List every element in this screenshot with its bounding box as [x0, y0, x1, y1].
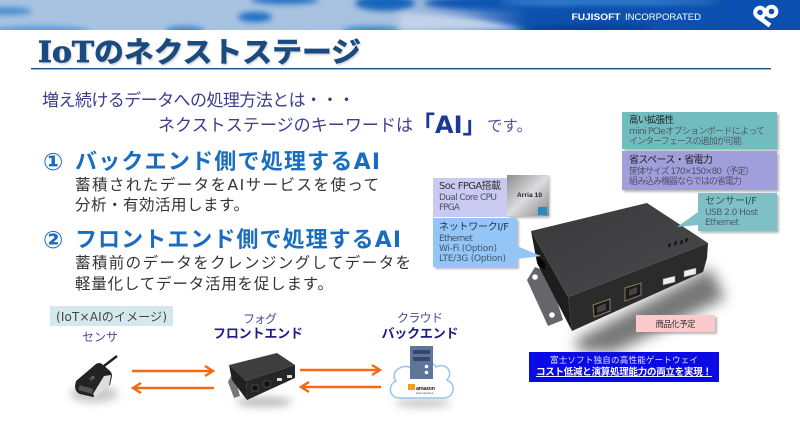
- image caption: (IoT×AIのイメージ): [56, 310, 167, 324]
- callout: network I/F: [433, 218, 541, 269]
- section 2: front-end AI: フロントエンド側で処理するAI: [75, 228, 401, 253]
- icon: Arria 10 chip: [507, 175, 550, 218]
- callout: space saving: 筐体サイズ 170×150×80（予定）: [629, 165, 754, 177]
- section 2: front-end AI: 蓄積前のデータをクレンジングしてデータを: [75, 253, 411, 272]
- intro text: です。: [487, 117, 532, 135]
- label: cloud back-end: クラウド: [397, 311, 443, 325]
- intro text: 「AI」: [411, 111, 487, 139]
- callout: network I/F: Wi-Fi (Option): [439, 244, 497, 254]
- company name: [572, 12, 701, 23]
- intro text: [42, 90, 532, 139]
- device shadow: [575, 268, 725, 352]
- arrow: sensor to fog: [132, 366, 213, 376]
- title: IoTのネクストステージ: [39, 36, 362, 70]
- title: [31, 35, 771, 70]
- callout: SoC FPGA: [433, 178, 509, 217]
- mounting flange: [527, 267, 563, 326]
- title: IoTのネクストステージ: [38, 35, 361, 69]
- label: sensor: センサ: [82, 330, 118, 344]
- company name: INCORPORATED: [625, 12, 701, 23]
- ethernet ports: [593, 299, 610, 317]
- section 1: back-end AI: 分析・有効活用します。: [75, 196, 249, 214]
- arrow: fog to cloud: [300, 365, 380, 375]
- callout: sensor I/F: Ethernet: [705, 218, 739, 228]
- icon: cloud server: [390, 346, 453, 408]
- label: cloud back-end: バックエンド: [382, 327, 458, 342]
- icon: fog gateway: [228, 353, 295, 407]
- icon: company logo: [755, 7, 776, 25]
- callout: SoC FPGA: Soc FPGA搭載: [439, 179, 501, 192]
- label: fog front-end: フロントエンド: [213, 327, 303, 342]
- icon: cloud server: amazon: [416, 386, 436, 392]
- callout: SoC FPGA: FPGA: [439, 203, 461, 213]
- label: fog front-end: [213, 312, 303, 342]
- vents: [668, 238, 688, 247]
- label: planned for commercialization: 商品化予定: [656, 319, 696, 330]
- icon: sensor device: SR: [88, 374, 96, 382]
- banner: proprietary gateway: コスト低減と演算処理能力の両立を実現！: [536, 366, 712, 378]
- section 1: back-end AI: [43, 148, 380, 214]
- callout: expandability: 高い拡張性: [629, 114, 674, 126]
- label: planned for commercialization: [636, 315, 717, 334]
- callout: expandability: mini PCIeオプションボードによって: [629, 126, 765, 137]
- section 1: back-end AI: 蓄積されたデータをAIサービスを使って: [75, 175, 379, 194]
- callout: sensor I/F: [677, 193, 779, 233]
- callout: sensor I/F: センサーI/F: [705, 195, 757, 207]
- callout: SoC FPGA: Dual Core CPU: [439, 193, 497, 203]
- icon: sensor device: [70, 356, 118, 403]
- section 2: front-end AI: [43, 226, 411, 293]
- section 2: front-end AI: 軽量化してデータ活用を促します。: [75, 274, 333, 293]
- usb ports: [663, 276, 675, 285]
- callout: expandability: インターフェースの追加が可能: [629, 135, 742, 147]
- section 1: back-end AI: ①: [43, 148, 63, 176]
- icon: Arria 10 chip: Arria 10: [517, 192, 542, 199]
- callout: space saving: [622, 151, 779, 192]
- banner: proprietary gateway: 富士ソフト独自の高性能ゲートウェイ: [550, 355, 698, 366]
- callout: space saving: 省スペース・省電力: [629, 153, 713, 166]
- section 2: front-end AI: ②: [43, 226, 63, 254]
- main gateway device: [527, 203, 725, 352]
- callout: network I/F: LTE/3G (Option): [439, 254, 506, 264]
- image caption: [50, 306, 173, 326]
- intro text: ネクストステージのキーワードは: [158, 116, 413, 136]
- callout: expandability: [622, 112, 779, 151]
- arrow: cloud to fog: [301, 382, 381, 392]
- label: cloud back-end: [382, 311, 458, 342]
- intro text: 増え続けるデータへの処理方法とは・・・: [42, 90, 355, 111]
- callout: sensor I/F: USB 2.0 Host: [705, 208, 758, 218]
- banner: proprietary gateway: [529, 352, 719, 382]
- arrow: fog to sensor: [133, 383, 214, 393]
- side port: [537, 256, 545, 270]
- company name: FUJISOFT: [572, 12, 621, 23]
- callout: network I/F: Ethernet: [439, 234, 473, 244]
- callout: space saving: 組み込み機器ならではの省電力: [629, 175, 742, 187]
- label: fog front-end: フォグ: [243, 312, 277, 326]
- callout: network I/F: ネットワークI/F: [439, 221, 509, 233]
- header banner: [0, 0, 800, 30]
- icon: cloud server: web services: [416, 391, 434, 395]
- section 1: back-end AI: バックエンド側で処理するAI: [75, 150, 380, 175]
